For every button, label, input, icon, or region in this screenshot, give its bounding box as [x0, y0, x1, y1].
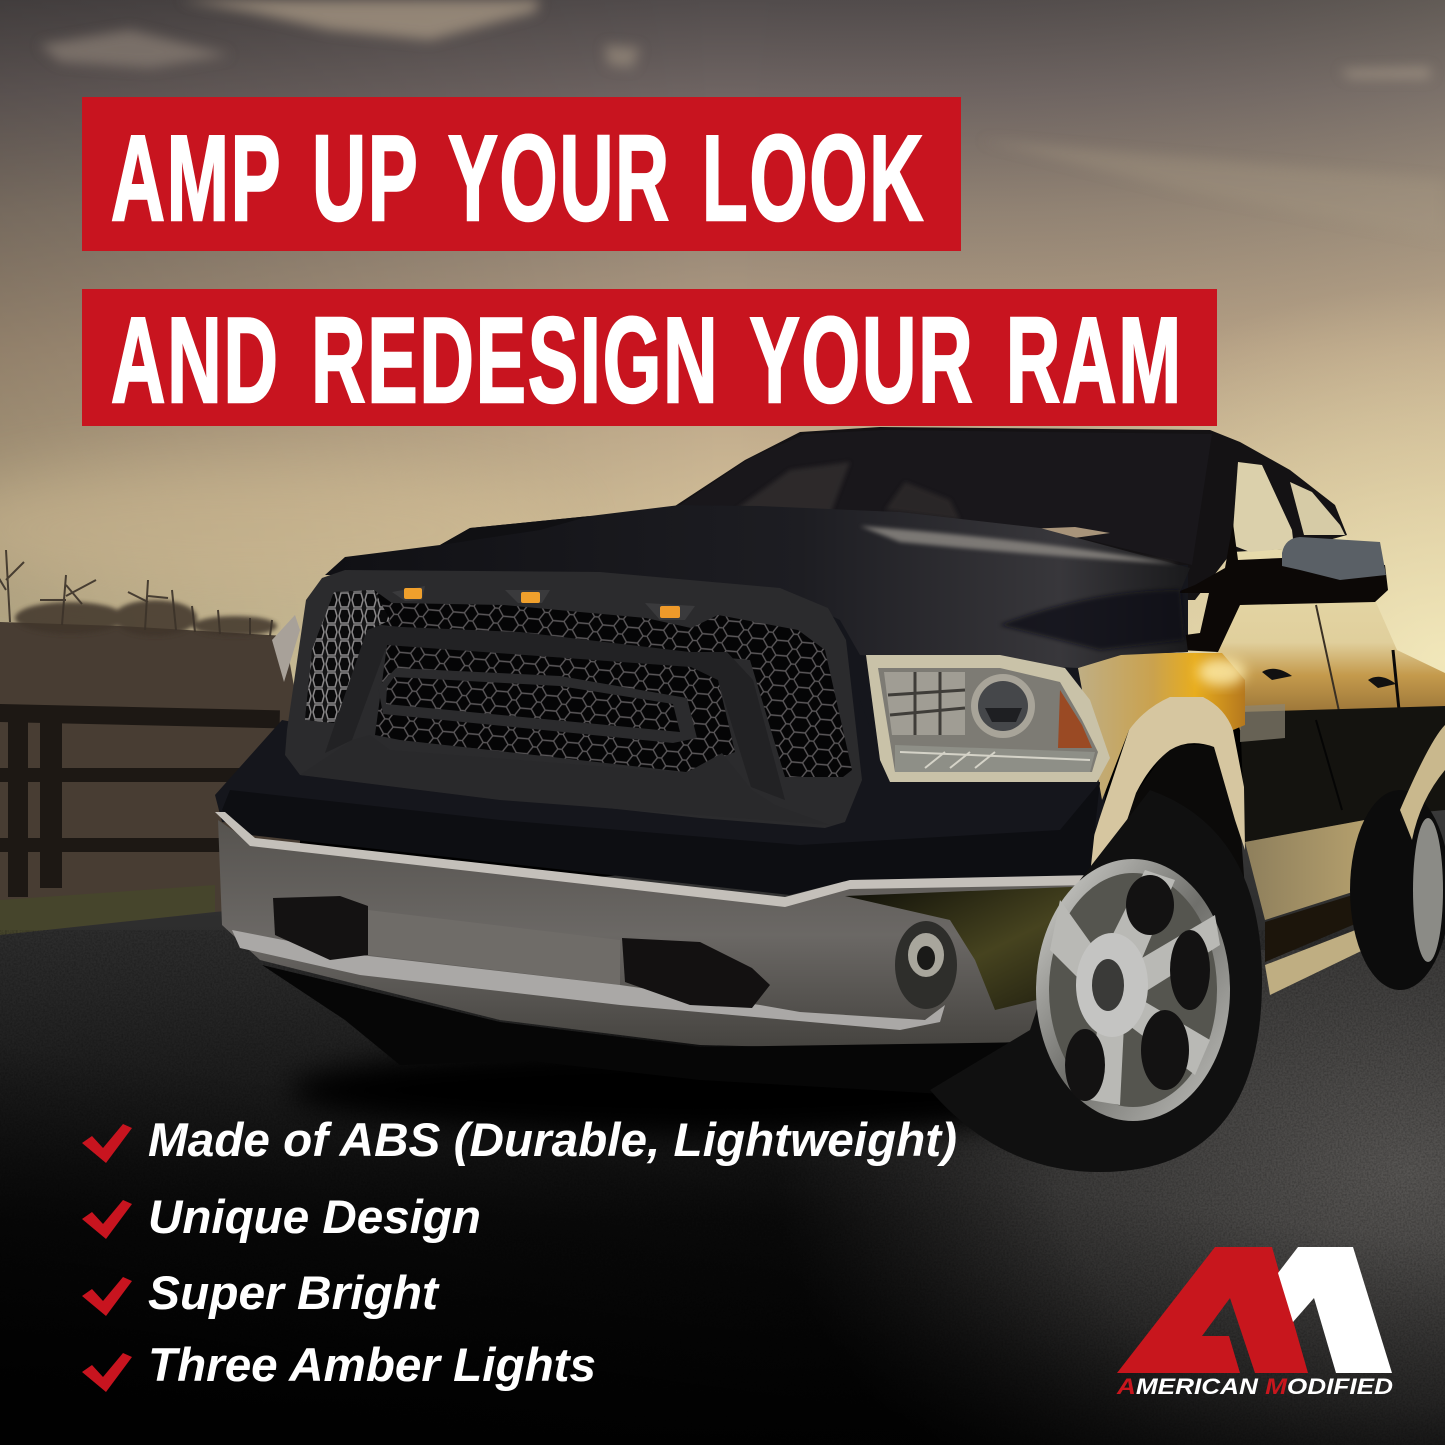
rear wheel	[1350, 725, 1445, 990]
side sill and running board	[1245, 810, 1420, 995]
hood	[325, 505, 1190, 668]
sun glare	[1198, 658, 1246, 686]
feature 3: Super Bright	[148, 1266, 440, 1319]
rim spokes	[1050, 870, 1220, 1105]
check icon 3	[82, 1277, 132, 1316]
truck shadow on road	[290, 1045, 1150, 1135]
wooden fence	[0, 704, 280, 897]
bumper olive reflection	[845, 886, 1095, 1010]
logo letter A	[1117, 1247, 1308, 1373]
bumper upper dark section	[222, 782, 1100, 895]
grille	[285, 570, 862, 828]
road	[0, 800, 1445, 1445]
grass verge	[0, 885, 215, 935]
lower honeycomb mesh	[375, 645, 735, 772]
bottom dark vignette	[0, 1040, 1445, 1445]
door lower panels	[1240, 704, 1445, 842]
feature 1: Made of ABS (Durable, Lightweight)	[148, 1113, 957, 1166]
headline line 1: AMP UP YOUR LOOK	[111, 110, 925, 246]
chrome strip	[215, 812, 1097, 907]
left headlight edge	[272, 615, 300, 682]
horizon glow left	[0, 460, 570, 600]
logo wordmark: AMERICAN MODIFIED	[1116, 1374, 1393, 1399]
headline banner 2	[82, 289, 1217, 428]
bumper centre plate	[368, 910, 620, 985]
side windows	[1232, 462, 1345, 552]
chrome bumper body	[218, 820, 1095, 1050]
front body base	[300, 560, 1188, 880]
under bumper	[262, 965, 1040, 1095]
logo: American Modified	[1116, 1247, 1393, 1399]
left tow pocket	[273, 896, 368, 960]
headline banner 1	[82, 97, 961, 251]
front wheel	[930, 790, 1262, 1172]
wheel arch trim	[1080, 697, 1245, 878]
centre bar mesh	[386, 677, 680, 732]
lower grille plate	[300, 735, 830, 825]
wheel well	[1105, 745, 1245, 900]
big inner bezel	[325, 626, 785, 800]
background: sunset sky	[0, 0, 1445, 700]
check icon 1	[82, 1124, 132, 1163]
cab and windshield	[675, 427, 1347, 600]
check icon 2	[82, 1200, 132, 1239]
front fascia below grille	[215, 700, 1100, 880]
logo numeral 1	[1278, 1247, 1392, 1373]
windshield	[680, 430, 1212, 565]
cab door panel reflecting sky	[1215, 535, 1445, 730]
rim pockets	[1065, 875, 1210, 1101]
right tow pocket	[622, 938, 770, 1008]
amber lights	[392, 586, 695, 620]
windshield reflections	[735, 462, 1110, 540]
hood highlights	[440, 516, 1184, 650]
grille outer frame	[285, 570, 862, 828]
bumper lower highlight	[232, 930, 945, 1030]
sky clouds	[40, 0, 1445, 240]
left bright mesh	[305, 590, 390, 723]
fog light	[895, 921, 957, 1009]
feature 2: Unique Design	[148, 1190, 481, 1243]
side mirror	[1175, 523, 1388, 652]
background: treeline and field	[0, 550, 300, 935]
feature list	[82, 1113, 957, 1392]
rim	[1036, 859, 1230, 1121]
feature 4: Three Amber Lights	[148, 1338, 596, 1391]
tyre	[930, 790, 1262, 1172]
headlight	[866, 655, 1110, 782]
fender with sunset reflection	[1078, 653, 1245, 800]
projector lens	[971, 674, 1035, 738]
hub	[1076, 933, 1148, 1037]
door handles and seams	[1262, 605, 1408, 800]
centre bar surround	[378, 668, 697, 743]
upper honeycomb mesh	[305, 590, 852, 777]
check icon 4	[82, 1353, 132, 1392]
truck	[215, 427, 1445, 1172]
